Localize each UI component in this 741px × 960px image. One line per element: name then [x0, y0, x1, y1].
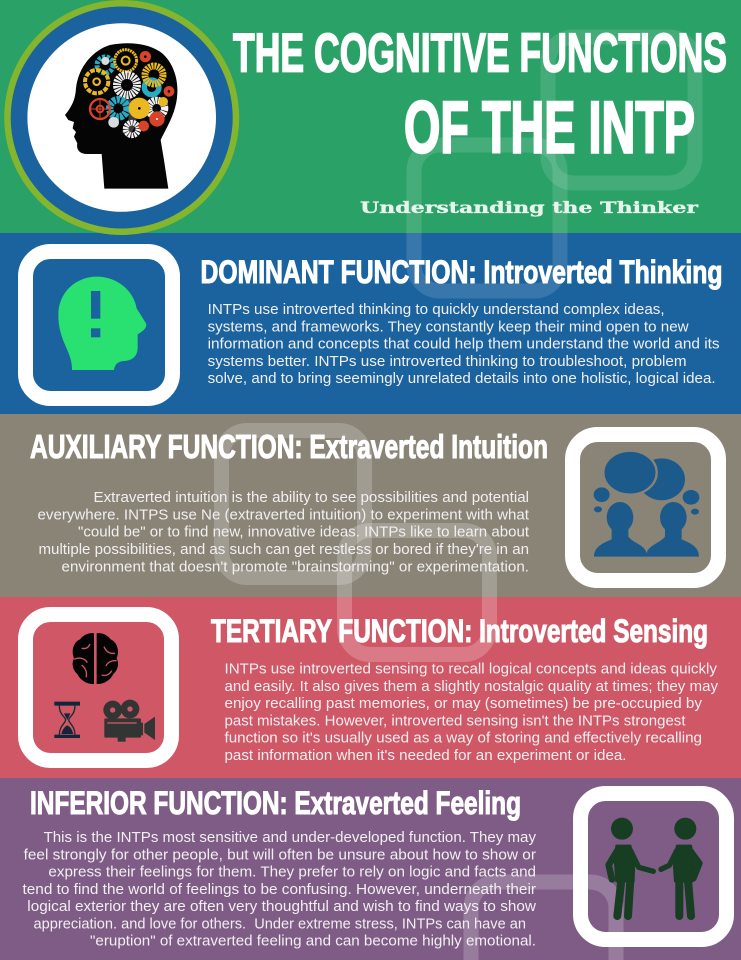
section: inferior function	[22, 785, 726, 950]
text block: auxiliary function: multiple possibilities, and as such can get restless or bored if they're in an	[38, 542, 529, 558]
text block: dominant function: systems, and frameworks. They constantly keep their mind open to new	[208, 319, 689, 335]
text block: inferior function	[22, 830, 537, 950]
icon: head with gears in circular badge	[4, 0, 239, 235]
text block: tertiary function: and easily. It also gives them a slightly nostalgic quality at times; they may	[224, 679, 719, 695]
text block: tertiary function: function so it's usually used as a way of storing and effectively recalling	[224, 731, 702, 747]
text block: tertiary function: enjoy recalling past memories, or may (sometimes) be pre-occupied by	[224, 696, 703, 712]
text block: auxiliary function: everywhere. INTPS use Ne (extraverted intuition) to experiment with what	[38, 507, 529, 523]
text block: auxiliary function: "could be" or to find new, innovative ideas. INTPs like to learn about	[78, 525, 529, 541]
section: tertiary function	[26, 613, 719, 764]
text block: auxiliary function	[38, 490, 529, 576]
text block: inferior function: tend to find the world of feelings to be confusing. However, underneath their	[22, 882, 536, 898]
text block: dominant function: solve, and to bring seemingly unrelated details into one holistic, logical idea.	[208, 371, 716, 387]
panel: tertiary function band	[0, 597, 741, 778]
icon: head with exclamation mark in frame	[26, 252, 172, 398]
icon: hourglass	[54, 702, 80, 738]
panel: auxiliary function band	[0, 414, 741, 597]
icon: brain	[73, 633, 118, 684]
text block: tertiary function: past information when it's needed for an experiment or idea.	[224, 748, 626, 764]
icon: two people shaking hands in frame	[580, 794, 726, 940]
text block: inferior function: This is the INTPs most sensitive and under-developed function. They may	[44, 830, 537, 846]
text block: auxiliary function: Extraverted intuition is the ability to see possibilities and potential	[94, 490, 529, 506]
section: dominant function	[26, 252, 722, 398]
title	[233, 22, 727, 168]
text block: inferior function: appreciation. and love for others. Under extreme stress, INTPs can have an	[34, 916, 526, 932]
text block: inferior function: "eruption" of extraverted feeling and can become highly emotional.	[90, 934, 536, 950]
subtitle: Understanding the Thinker	[360, 198, 699, 217]
text block: tertiary function: INTPs use introverted sensing to recall logical concepts and ideas quickly	[224, 662, 718, 678]
heading: auxiliary function: AUXILIARY FUNCTION: Extraverted Intuition	[30, 428, 548, 465]
icon: film camera	[103, 700, 155, 742]
text block: inferior function: logical exterior they are often very thoughtful and wish to find ways to show	[27, 899, 537, 915]
panel: inferior function band	[0, 778, 741, 960]
section: auxiliary function	[30, 428, 718, 580]
text block: dominant function	[208, 302, 720, 387]
icon: two people talking in frame	[572, 434, 718, 580]
text block: tertiary function	[224, 662, 719, 764]
text block: auxiliary function: environment that doesn't promote "brainstorming" or experimentation.	[62, 560, 529, 576]
text block: inferior function: feel strongly for other people, but will often be unsure about how to show or	[24, 847, 536, 863]
text block: dominant function: INTPs use introverted thinking to quickly understand complex ideas,	[208, 302, 665, 318]
panel: dominant function band	[0, 233, 741, 414]
text block: dominant function: information and concepts that could help them understand the world and its	[208, 337, 720, 353]
heading: inferior function: INFERIOR FUNCTION: Extraverted Feeling	[30, 785, 521, 821]
text block: inferior function: express their feelings for them. They prefer to rely on logic and facts and	[48, 865, 536, 881]
panel: header band	[0, 0, 741, 233]
text block: dominant function: systems better. INTPs use introverted thinking to troubleshoot, problem	[208, 354, 687, 370]
icon: brain, hourglass and film camera in frame	[26, 614, 172, 760]
text block: tertiary function: past mistakes. However, introverted sensing isn't the INTPs strongest	[224, 713, 686, 729]
